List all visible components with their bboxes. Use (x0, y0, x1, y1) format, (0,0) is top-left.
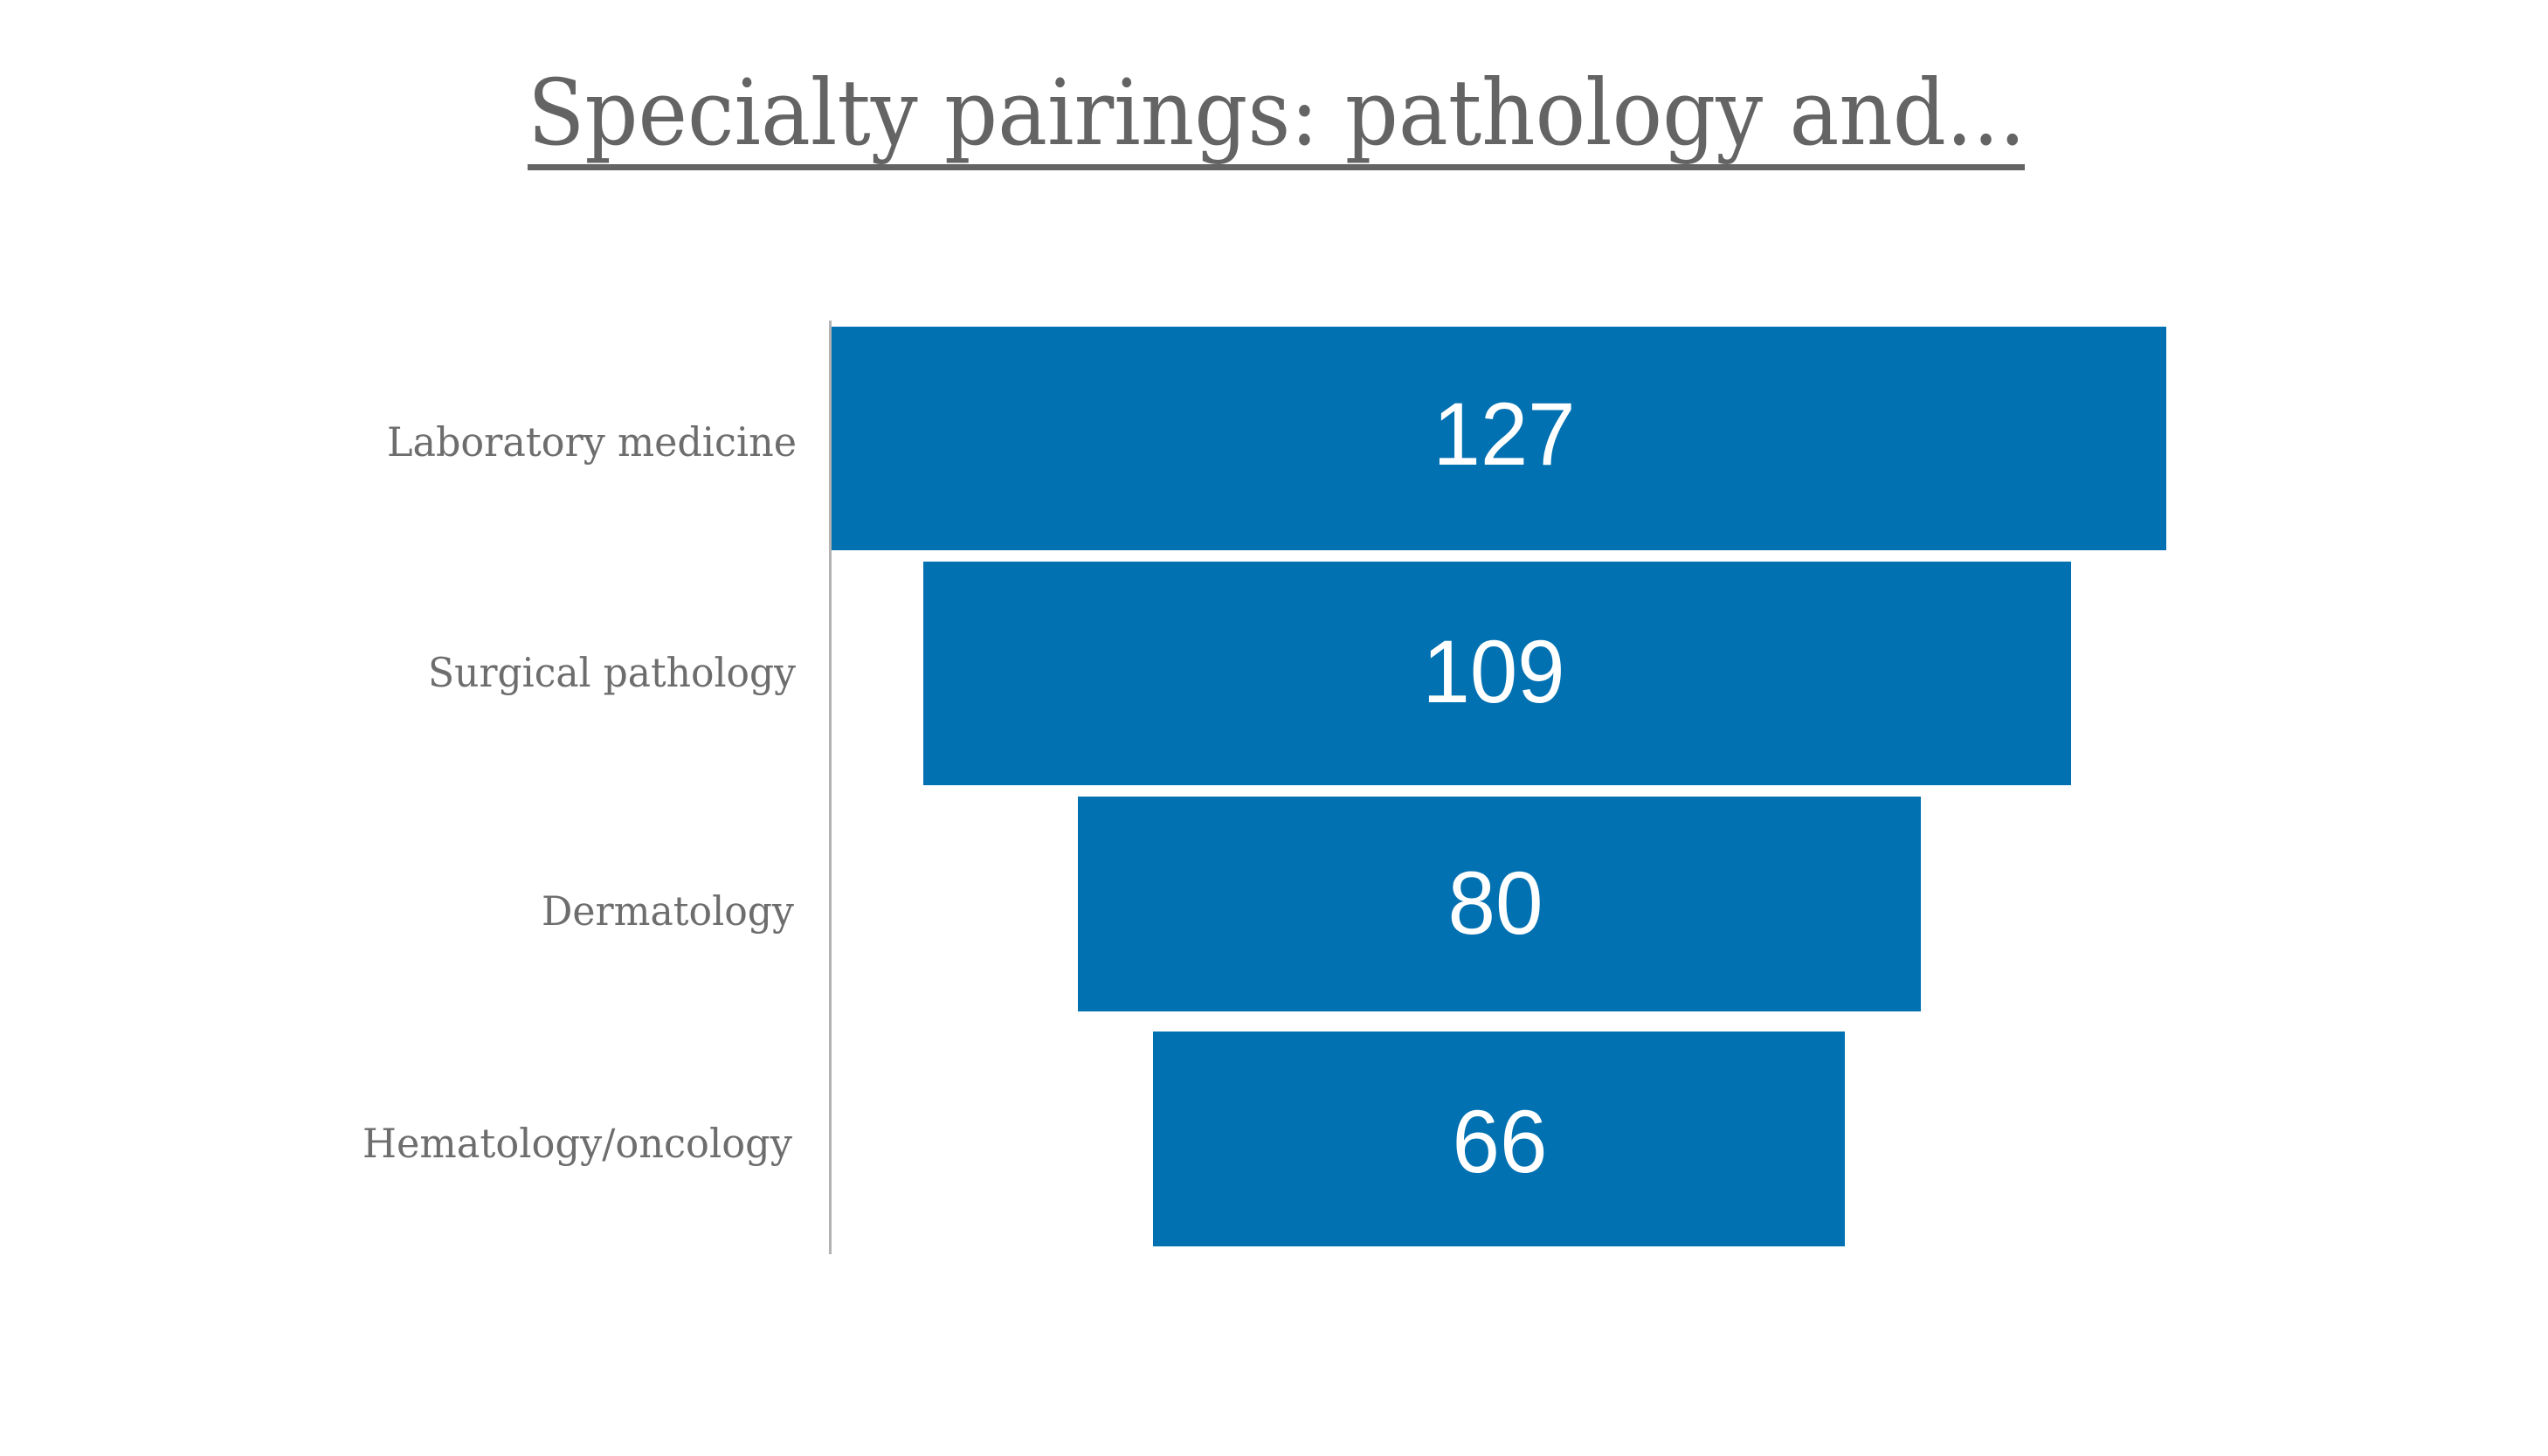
row: Hematology/oncology, 66: 66 (1452, 1092, 1548, 1191)
row: Hematology/oncology, 66 (363, 1032, 1845, 1246)
row: Dermatology, 80 (542, 797, 1921, 1011)
row: Hematology/oncology, 66: Hematology/oncology (363, 1120, 792, 1167)
row: Laboratory medicine, 127: Laboratory medicine (387, 418, 797, 466)
funnel bar chart (363, 321, 2166, 1254)
row: Dermatology, 80: 80 (1448, 853, 1543, 953)
row: Laboratory medicine, 127: 127 (1433, 384, 1576, 484)
row: Dermatology, 80: Dermatology (542, 887, 794, 935)
row: Surgical pathology, 109: 109 (1422, 622, 1565, 721)
axis line (829, 321, 832, 1254)
title: Specialty pairings: pathology and... (528, 59, 2026, 166)
row: Laboratory medicine, 127 (387, 327, 2166, 550)
row: Surgical pathology, 109 (428, 562, 2071, 785)
row: Surgical pathology, 109: Surgical pathology (428, 649, 796, 696)
